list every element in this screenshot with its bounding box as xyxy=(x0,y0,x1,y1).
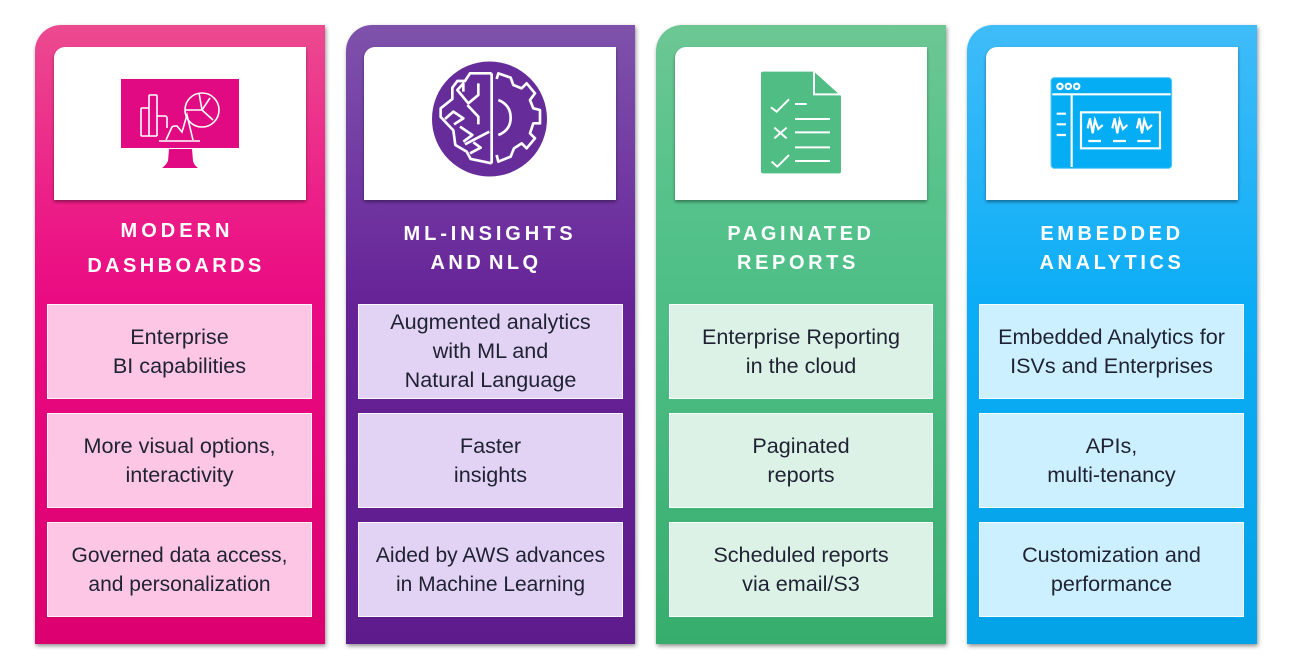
panel: paginated reports xyxy=(656,25,946,644)
text box 3: Scheduled reports xyxy=(713,542,889,566)
icon card: brain and gear xyxy=(364,47,616,200)
heading: PAGINATED xyxy=(727,223,875,245)
text box 3 xyxy=(979,522,1244,617)
text box 3: via email/S3 xyxy=(742,570,860,596)
text box 3: and personalization xyxy=(88,572,271,596)
text box 1: ISVs and Enterprises xyxy=(1010,352,1213,378)
text box 2: APIs, xyxy=(1086,432,1137,458)
text box 2: multi-tenancy xyxy=(1047,462,1176,486)
icon card: monitor with charts xyxy=(54,47,306,200)
text box 2: reports xyxy=(767,462,835,486)
heading: MODERN xyxy=(121,220,233,242)
heading xyxy=(87,220,265,277)
icon: embedded dashboard window xyxy=(1051,78,1172,168)
text box 3 xyxy=(47,522,312,617)
text box 1: BI capabilities xyxy=(113,352,246,378)
text box 1 xyxy=(669,304,933,399)
text box 1: Embedded Analytics for xyxy=(998,324,1225,348)
text box 1: Augmented analytics xyxy=(390,309,591,334)
text box 2 xyxy=(979,413,1244,508)
icon card: report document xyxy=(675,47,927,200)
text box 2: More visual options, xyxy=(83,432,276,458)
icon: report document xyxy=(761,72,841,173)
text box 3 xyxy=(669,522,933,617)
text box 2 xyxy=(669,413,933,508)
heading: ML-INSIGHTS xyxy=(404,223,576,245)
panel: modern dashboards xyxy=(35,25,325,644)
text box 3 xyxy=(358,522,623,617)
text box 2 xyxy=(47,413,312,508)
heading: REPORTS xyxy=(737,252,859,274)
text box 3: Aided by AWS advances xyxy=(376,544,605,566)
icon card: embedded dashboard window xyxy=(986,47,1238,200)
text box 2: Paginated xyxy=(752,432,850,458)
text box 3: in Machine Learning xyxy=(396,572,585,596)
text box 3: Governed data access, xyxy=(72,544,287,566)
text box 1: Enterprise Reporting xyxy=(702,324,900,348)
text box 3: performance xyxy=(1051,570,1172,596)
text box 1: Natural Language xyxy=(405,367,576,392)
text box 1: Enterprise xyxy=(130,324,229,348)
text box 3: Customization and xyxy=(1022,542,1201,566)
heading xyxy=(404,223,576,274)
heading xyxy=(727,223,875,274)
heading xyxy=(1039,223,1184,274)
heading: DASHBOARDS xyxy=(87,255,265,277)
text box 1: with ML and xyxy=(433,338,548,363)
text box 1 xyxy=(979,304,1244,399)
text box 2: Faster xyxy=(460,432,521,458)
heading: ANALYTICS xyxy=(1039,252,1184,274)
icon: brain and gear xyxy=(432,62,547,176)
panel: ml insights xyxy=(346,25,635,644)
text box 1 xyxy=(358,304,623,399)
text box 2: insights xyxy=(454,462,527,486)
heading: EMBEDDED xyxy=(1040,223,1184,245)
icon: monitor with charts xyxy=(121,79,239,168)
panel: embedded analytics xyxy=(967,25,1257,644)
text box 1 xyxy=(47,304,312,399)
heading: AND NLQ xyxy=(431,252,541,274)
text box 2: interactivity xyxy=(125,462,234,486)
text box 1: in the cloud xyxy=(746,352,856,378)
text box 2 xyxy=(358,413,623,508)
